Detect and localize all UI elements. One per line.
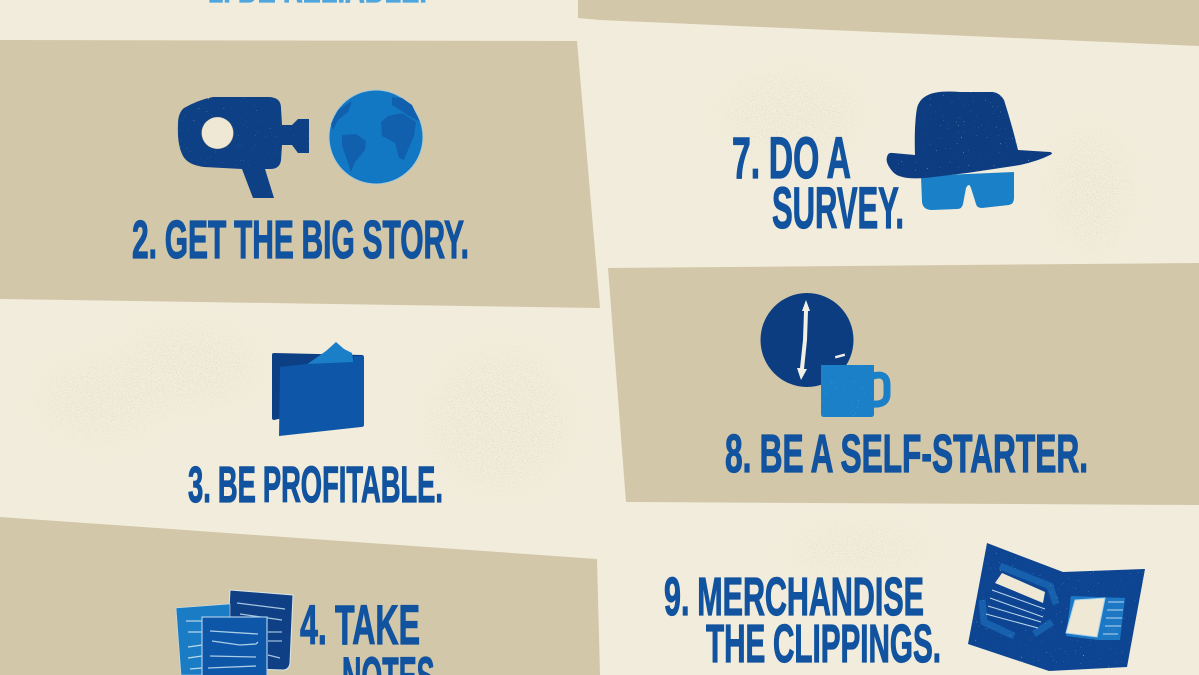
heading: 4: 4. TAKE	[300, 593, 420, 656]
heading: 7: SURVEY.	[772, 176, 904, 241]
heading: 7: 7. DO A	[732, 126, 851, 191]
heading: 4	[300, 593, 442, 675]
heading: 3: 3. BE PROFITABLE.	[188, 456, 443, 513]
icon: coffee mug	[821, 365, 887, 417]
panel: 2 get the big story	[0, 40, 600, 308]
icon: movie camera	[178, 97, 309, 198]
heading: 9	[664, 567, 941, 674]
panel: 7 do a survey	[732, 92, 1052, 241]
icon: sheets of notes	[176, 590, 293, 675]
panel: top right tan band	[578, 0, 1199, 46]
icon: hat and sunglasses	[887, 92, 1052, 210]
panel: 8 be a self-starter	[608, 263, 1199, 505]
panel: 3 be profitable	[188, 342, 443, 513]
heading: 9: THE CLIPPINGS.	[706, 614, 941, 674]
heading: 2: 2. GET THE BIG STORY.	[132, 210, 469, 270]
heading: 7	[732, 126, 904, 241]
icon: globe	[329, 90, 423, 184]
icon: wallet	[272, 342, 364, 436]
panel: 9 merchandise the clippings	[664, 543, 1145, 674]
icon: clock	[760, 293, 854, 387]
icon: open folder with clippings	[968, 543, 1145, 671]
panel: 4 take notes	[0, 517, 600, 675]
heading: 9: 9. MERCHANDISE	[664, 567, 924, 627]
